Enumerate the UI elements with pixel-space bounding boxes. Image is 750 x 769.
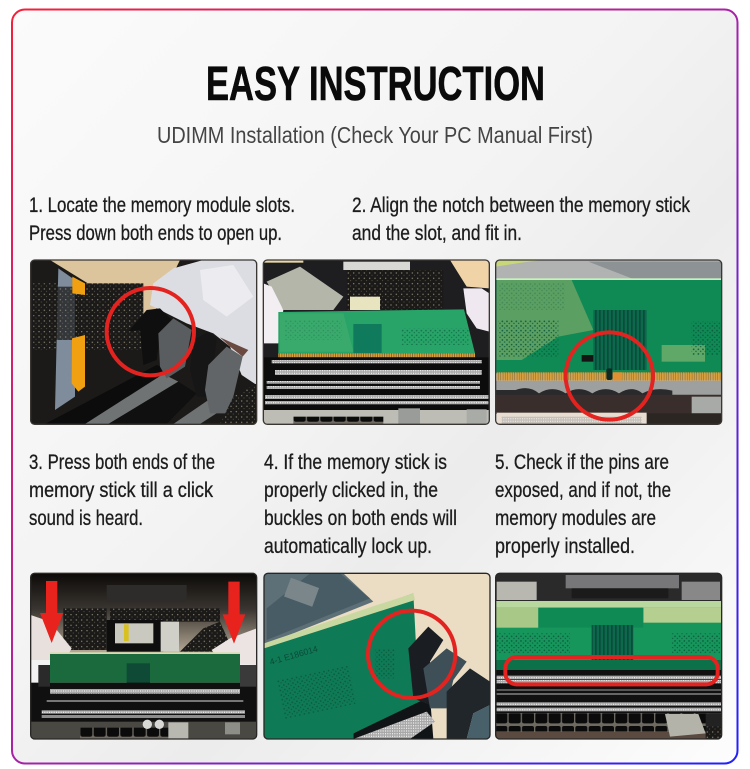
step 5 text [495, 451, 671, 558]
step 2 text: and the slot, and fit in. [352, 222, 522, 245]
step 4 text: properly clicked in, the [264, 479, 438, 502]
photo: opening slot clips [31, 260, 257, 424]
step 1 text: Press down both ends to open up. [29, 222, 282, 245]
step 3 text: memory stick till a click [29, 479, 213, 502]
serial text on board: 4-1 E186014 [268, 644, 319, 667]
step 2 text [352, 194, 690, 245]
step 5 text: 5. Check if the pins are [495, 451, 669, 474]
step 4 text: buckles on both ends will [264, 507, 457, 530]
step 5 text: memory modules are [495, 507, 656, 530]
step 1 text [29, 194, 295, 245]
photo: pins check [496, 573, 722, 739]
step 4 text: 4. If the memory stick is [264, 451, 447, 474]
step 4 text: automatically lock up. [264, 535, 432, 558]
step 3 text: 3. Press both ends of the [29, 451, 215, 474]
step 3 text: sound is heard. [29, 507, 143, 530]
step 4 text [264, 451, 457, 558]
step 3 text [29, 451, 215, 530]
photo: buckles locked [264, 573, 490, 739]
icon: right down arrow [223, 582, 245, 644]
photo: notch close-up [496, 260, 722, 424]
step 5 text: properly installed. [495, 535, 635, 558]
photo: aligning memory stick [263, 260, 489, 424]
icon: left down arrow [40, 581, 63, 643]
title: EASY INSTRUCTION [206, 58, 545, 111]
step 1 text: 1. Locate the memory module slots. [29, 194, 295, 217]
step 5 text: exposed, and if not, the [495, 479, 671, 502]
photo: pressing both ends [31, 573, 257, 739]
subtitle: UDIMM Installation (Check Your PC Manual First) [157, 122, 593, 148]
